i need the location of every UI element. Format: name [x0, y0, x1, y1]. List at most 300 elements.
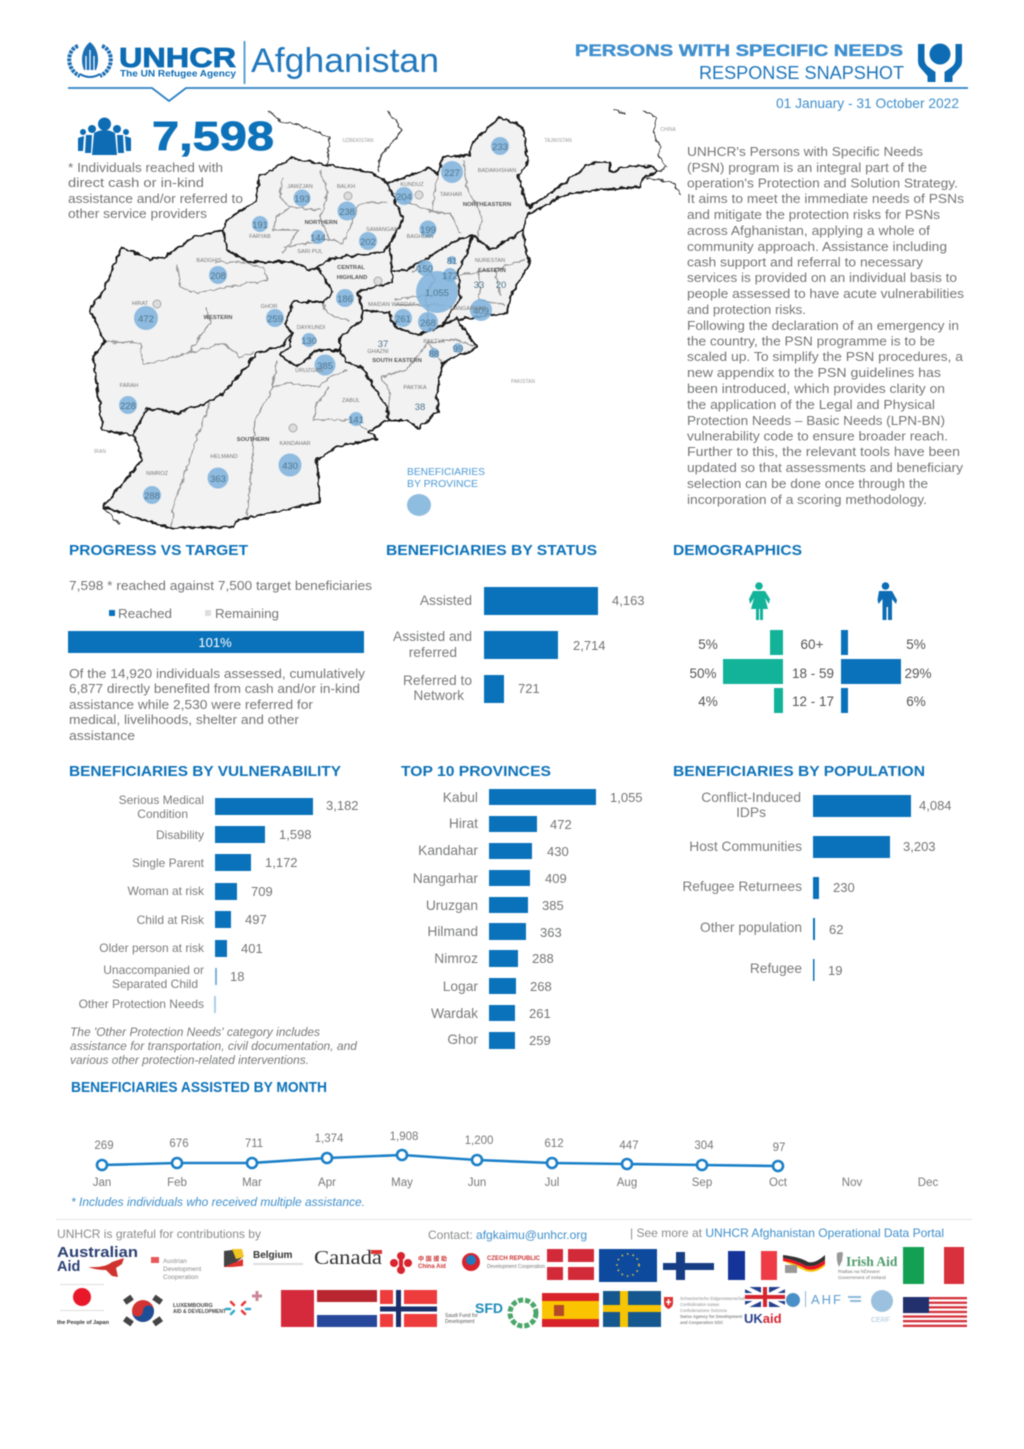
monthly line chart: Jul: [545, 1177, 559, 1189]
logo: Czech Republic: CZECH REPUBLIC: [487, 1256, 541, 1262]
status bar chart: Network: [413, 688, 464, 703]
vulnerability bar chart: Child at Risk: [137, 913, 205, 927]
monthly line chart: Oct: [769, 1177, 788, 1189]
thanks line: UNHCR is grateful for contributions by: [57, 1227, 261, 1241]
intro text: scaled up. To simplify the PSN procedures, a: [687, 349, 964, 364]
intro text: and protection risks.: [687, 302, 806, 317]
province and region labels: HIRAT: [132, 301, 149, 307]
province and region labels: BALKH: [337, 184, 355, 190]
donor logos: [57, 1245, 967, 1327]
vulnerability bar chart: 1,172: [265, 855, 298, 870]
province values: 38: [415, 402, 425, 413]
logo: Austrian Development Cooperation: Development: [163, 1266, 201, 1273]
heading: DEMOGRAPHICS: [673, 543, 802, 559]
contact: Contact: afgkaimu@unhcr.org: [428, 1228, 587, 1242]
panel: beneficiaries by status: [386, 543, 645, 703]
vulnerability bar chart: 1,598: [279, 827, 312, 842]
intro text: services is provided on an individual basis to: [687, 270, 957, 285]
logo: Canada: Canadä: [314, 1247, 382, 1269]
intro text: incorporation of a scoring methodology.: [687, 492, 927, 507]
progress bar: 101%: [198, 635, 232, 650]
population pyramid: 29%: [904, 666, 932, 681]
map legend: BENEFICIARIES: [407, 466, 485, 478]
population pyramid: 12 - 17: [792, 694, 834, 709]
monthly line chart: 97: [773, 1142, 785, 1154]
heading: PROGRESS VS TARGET: [69, 543, 248, 559]
logo: Australian Aid: [57, 1245, 138, 1277]
logo: Czech Republic: [462, 1253, 545, 1271]
vulnerability bar chart: [79, 793, 359, 1013]
logo: Korea: [123, 1295, 163, 1326]
vulnerability bar chart: 18: [230, 969, 244, 984]
heading: BENEFICIARIES ASSISTED BY MONTH: [71, 1080, 327, 1096]
panel: progress vs target: [68, 543, 372, 743]
population bar chart: Other population: [700, 920, 802, 935]
monthly line chart: 612: [544, 1138, 564, 1150]
snapshot title: PERSONS WITH SPECIFIC NEEDS: [575, 42, 903, 60]
province bar chart: 259: [529, 1033, 551, 1048]
map of Afghanistan: [90, 110, 680, 528]
vulnerability bar chart: Older person at risk: [99, 941, 205, 955]
progress note: assistance: [69, 728, 135, 743]
province bar chart: Kandahar: [418, 843, 478, 858]
province and region labels: GHOR: [261, 304, 277, 310]
intro text: operation's Protection and Solution Strategy.: [687, 176, 958, 190]
province and region labels: URUZGAN: [295, 368, 323, 374]
logo: CERF: CERF: [871, 1317, 890, 1324]
province values: 186: [337, 294, 353, 305]
map legend: [407, 466, 485, 516]
icon: people group: [78, 118, 131, 155]
province values: 268: [420, 318, 436, 329]
logo: China Aid: [390, 1252, 447, 1274]
province values: 409: [473, 306, 489, 317]
progress note: 6,877 directly benefited from cash and/or in-kind: [69, 681, 360, 696]
intro text: the application of the Legal and Physical: [687, 397, 935, 412]
note: other service providers: [68, 206, 207, 221]
monthly line chart: Dec: [918, 1177, 938, 1189]
province and region labels: [94, 127, 676, 477]
province and region labels: NIMROZ: [146, 471, 169, 477]
status bar chart: Assisted: [420, 593, 472, 608]
province and region labels: JAWZJAN: [287, 184, 313, 190]
province values: 199: [420, 225, 436, 236]
date range: 01 January - 31 October 2022: [776, 96, 959, 111]
province and region labels: NORTHERN: [305, 220, 337, 226]
province bar chart: Logar: [443, 979, 478, 994]
flag: Sweden: [603, 1291, 661, 1327]
population bar chart: 230: [833, 880, 855, 895]
monthly line chart: Apr: [318, 1177, 336, 1189]
province bar chart: 363: [540, 925, 562, 940]
population bar chart: 4,084: [919, 798, 952, 813]
province and region labels: SARI PUL: [297, 249, 323, 255]
population bar chart: IDPs: [736, 805, 766, 820]
note: [68, 160, 243, 221]
flag: Netherlands: [317, 1290, 377, 1327]
legend: [109, 606, 279, 621]
province values: 227: [444, 168, 460, 179]
map shapes: [90, 110, 680, 528]
province and region labels: FARAH: [120, 383, 138, 389]
icon: hands and person: [918, 44, 962, 82]
vulnerability bar chart: Serious Medical: [119, 793, 204, 807]
logo: AHF: AHF: [811, 1292, 843, 1307]
logo: Switzerland: Swiss Agency for Development: [680, 1314, 743, 1319]
status bar chart: 721: [518, 681, 540, 696]
flag: USA: [903, 1297, 967, 1327]
province bar chart: 385: [542, 898, 564, 913]
population bar chart: 62: [829, 922, 843, 937]
icon: female: [749, 582, 770, 620]
logo: Australian Aid: Australian: [57, 1245, 138, 1261]
province values: 1,055: [425, 288, 449, 299]
province and region labels: CHINA: [660, 127, 676, 133]
logo: UK aid: [744, 1287, 785, 1326]
logo: Irish Aid: Government of Ireland: [838, 1275, 886, 1281]
province and region labels: PAKTIKA: [403, 385, 427, 391]
vulnerability bar chart: 401: [241, 941, 263, 956]
province and region labels: HIGHLAND: [337, 275, 367, 281]
flag: EU: [599, 1249, 657, 1282]
province and region labels: BADGHIS: [196, 258, 222, 264]
snapshot subtitle: RESPONSE SNAPSHOT: [699, 62, 904, 83]
flag: Latvia: [281, 1290, 314, 1327]
province values: 202: [360, 237, 376, 248]
province values: 150: [417, 264, 433, 275]
logo: Luxembourg: LUXEMBOURG: [173, 1303, 213, 1309]
vulnerability bar chart: Condition: [137, 807, 188, 821]
legend: Reached: [118, 606, 172, 621]
intro text: vulnerability code to ensure broader reach.: [687, 428, 948, 444]
country title: Afghanistan: [251, 42, 439, 80]
intro text: been introduced, which provides clarity on: [687, 381, 945, 396]
vulnerability bar chart: Other Protection Needs: [79, 997, 204, 1011]
population pyramid: 60+: [801, 637, 824, 652]
category note: [70, 1027, 358, 1067]
intro text: (PSN) program is an integral part of the: [687, 160, 927, 175]
province bar chart: Nimroz: [434, 951, 478, 966]
logo: Australian Aid: Aid: [57, 1259, 80, 1275]
monthly line chart: Mar: [242, 1177, 262, 1189]
monthly line chart: Jun: [468, 1177, 486, 1189]
province values: 37: [378, 339, 388, 350]
province values: 288: [144, 491, 160, 502]
total reached: [68, 113, 274, 221]
footnote: * Includes individuals who received multiple assistance.: [71, 1197, 365, 1209]
population pyramid: [689, 630, 932, 713]
capacity markers: [153, 191, 423, 432]
vulnerability bar chart: Single Parent: [132, 856, 205, 870]
logo: Austrian Development Cooperation: Austrian: [163, 1258, 187, 1265]
intro text: cash support and referral to necessary: [687, 254, 923, 270]
province and region labels: UZBEKISTAN: [342, 138, 374, 144]
data portal: | See more at UNHCR Afghanistan Operational Data Portal: [630, 1226, 944, 1240]
province and region labels: NURESTAN: [475, 258, 505, 264]
province bubbles: [119, 137, 509, 504]
monthly line chart: 304: [694, 1140, 714, 1152]
progress note: assistance while 2,530 were referred for: [69, 697, 314, 712]
status bar chart: Referred to: [403, 673, 472, 688]
population pyramid: 4%: [698, 694, 718, 709]
flag: Finland: [663, 1252, 714, 1280]
population bar chart: 3,203: [903, 839, 936, 854]
population pyramid: 5%: [698, 637, 718, 652]
intro text: across Afghanistan, applying a whole of: [687, 223, 930, 238]
big number: 7,598: [152, 113, 274, 159]
logo: SFD: [445, 1300, 536, 1326]
icon: UNHCR logo: [69, 42, 111, 77]
province values: 363: [210, 474, 226, 485]
intro text: selection can be done once through the: [687, 476, 928, 491]
province values: 228: [120, 401, 136, 412]
logo: Switzerland: and Cooperation SDC: [680, 1320, 723, 1325]
status bar chart: referred: [409, 645, 457, 660]
logo: UK aid: UKaid: [744, 1311, 782, 1326]
province values: 33: [474, 280, 484, 291]
province values: 99: [453, 344, 463, 355]
monthly line chart: 1,200: [465, 1135, 493, 1147]
population bar chart: Refugee Returnees: [682, 879, 802, 894]
intro text: Further to this, the relevant tools have been: [687, 444, 960, 459]
monthly line chart: May: [391, 1177, 413, 1189]
category note: various other protection-related interventions.: [70, 1055, 309, 1067]
province values: 430: [282, 461, 298, 472]
heading: BENEFICIARIES BY VULNERABILITY: [69, 764, 341, 780]
flag: Norway: [380, 1290, 437, 1327]
logo: Austrian Development Cooperation: [151, 1257, 201, 1281]
panel: top 10 provinces: [401, 764, 643, 1049]
province values: 88: [429, 349, 439, 360]
province values: 20: [496, 280, 506, 291]
agency tagline: The UN Refugee Agency: [120, 68, 236, 78]
province and region labels: WESTERN: [204, 315, 232, 321]
vulnerability bar chart: 497: [245, 912, 267, 927]
population bar chart: Host Communities: [689, 839, 802, 854]
province bar chart: 288: [532, 951, 554, 966]
province and region labels: HELMAND: [210, 454, 238, 460]
progress note: Of the 14,920 individuals assessed, cumulatively: [69, 666, 365, 681]
population pyramid: 6%: [906, 694, 926, 709]
vulnerability bar chart: 3,182: [326, 798, 359, 813]
logo: Switzerland: [664, 1296, 746, 1325]
province and region labels: SOUTH EASTERN: [372, 358, 422, 364]
logo: Irish Aid: Rialtas na hÉireann: [838, 1268, 880, 1275]
population bar chart: Refugee: [750, 961, 802, 976]
province and region labels: BAGHLAN: [407, 234, 433, 240]
flag: Denmark: [547, 1249, 594, 1280]
province and region labels: TAJIKISTAN: [544, 138, 572, 144]
intro text: UNHCR's Persons with Specific Needs: [687, 144, 923, 159]
progress note: [69, 666, 365, 743]
province bar chart: 430: [547, 844, 569, 859]
UNHCR wordmark: UNHCR: [119, 42, 236, 73]
progress bar: [68, 631, 364, 653]
vulnerability bar chart: Unaccompanied or: [103, 963, 204, 977]
population bar chart: Conflict-Induced: [701, 790, 801, 805]
intro text: new appendix to the PSN guidelines has: [687, 365, 941, 380]
province and region labels: EASTERN: [478, 268, 506, 274]
province and region labels: GHAZNI: [367, 349, 389, 355]
logo: AHF: [786, 1291, 861, 1307]
note: direct cash or in-kind: [68, 175, 204, 190]
heading: BENEFICIARIES BY STATUS: [386, 543, 597, 559]
icon: male: [878, 582, 897, 620]
province values: 233: [492, 142, 508, 153]
logo: CERF: [871, 1290, 893, 1324]
province bar chart: Hirat: [449, 816, 478, 831]
province and region labels: NANGARHAR: [450, 306, 486, 312]
province bar chart: 472: [550, 817, 572, 832]
logo: SFD: Saudi Fund for: [445, 1313, 478, 1319]
logo: Luxembourg: AID & DEVELOPMENT: [173, 1309, 226, 1315]
province and region labels: PAKISTAN: [511, 379, 535, 385]
province values: 130: [301, 336, 317, 347]
progress note: medical, livelihoods, shelter and other: [69, 712, 300, 727]
logo: China Aid: China Aid: [418, 1264, 446, 1270]
monthly line chart: Nov: [842, 1177, 862, 1189]
province bar chart: Ghor: [447, 1032, 478, 1047]
intro text: people assessed to have acute vulnerabilities: [687, 286, 964, 301]
province and region labels: SAMANGAN: [366, 227, 398, 233]
population pyramid: 5%: [906, 637, 926, 652]
category note: assistance for transportation, civil documentation, and: [70, 1041, 358, 1053]
logo: Japan: the People of Japan: [57, 1320, 110, 1326]
logo: Germany: [783, 1255, 825, 1273]
province bar chart: 409: [545, 871, 567, 886]
logo: Irish Aid: [837, 1252, 898, 1281]
intro text: [687, 144, 964, 507]
status bar chart: 2,714: [573, 638, 606, 653]
vulnerability bar chart: Disability: [156, 828, 204, 842]
intro text: and mitigate the protection risks for PSNs: [687, 207, 940, 222]
province bar chart: 261: [529, 1006, 551, 1021]
footer: [57, 1226, 967, 1327]
status bar chart: Assisted and: [393, 629, 472, 644]
status bar chart: 4,163: [612, 593, 645, 608]
province bar chart: [413, 789, 643, 1049]
province bar chart: Wardak: [431, 1006, 478, 1021]
intro text: Protection Needs – Basic Needs (LPN-BN): [687, 413, 945, 428]
province values: 208: [210, 271, 226, 282]
panel: beneficiaries by population: [673, 764, 952, 981]
logo: SFD: Development: [445, 1319, 475, 1325]
province values: 191: [252, 220, 268, 231]
logo: Belgium: Belgium: [253, 1250, 293, 1261]
province and region labels: KUNDUZ: [400, 182, 424, 188]
province values: 141: [348, 415, 364, 426]
monthly line chart: Jan: [93, 1177, 111, 1189]
province values: 144: [310, 233, 326, 244]
flag: France: [728, 1251, 777, 1280]
province values: 193: [294, 194, 310, 205]
vulnerability bar chart: Separated Child: [112, 977, 198, 991]
monthly line chart: 1,374: [315, 1133, 344, 1145]
province and region labels: FARYAB: [249, 234, 271, 240]
province values: 472: [138, 314, 154, 325]
flag: Italy: [903, 1247, 964, 1284]
population pyramid: 50%: [689, 666, 717, 681]
province and region labels: KANDAHAR: [279, 441, 311, 447]
province values: 81: [447, 256, 457, 267]
monthly line chart: 269: [94, 1140, 114, 1152]
panel: beneficiaries by vulnerability: [69, 764, 359, 1067]
logo: Irish Aid: Irish Aid: [846, 1254, 898, 1269]
logo: SFD: SFD: [475, 1300, 503, 1316]
population bar chart: [682, 790, 952, 981]
category note: The 'Other Protection Needs' category includes: [70, 1027, 320, 1039]
note: * Individuals reached with: [68, 160, 223, 175]
logo: Switzerland: Schweizerische Eidgenossenschaft: [680, 1296, 746, 1301]
logo: China Aid: 中 国 援 助: [418, 1255, 447, 1263]
province and region labels: TAKHAR: [440, 192, 462, 198]
monthly line chart: 676: [169, 1138, 189, 1150]
intro text: community approach. Assistance including: [687, 239, 947, 254]
legend: Remaining: [215, 606, 279, 621]
province values: 204: [396, 192, 412, 203]
province bar chart: 268: [530, 979, 552, 994]
province bar chart: Hilmand: [427, 924, 478, 939]
province values: 385: [317, 361, 333, 372]
province values: [120, 142, 508, 502]
panel: demographics: [673, 543, 932, 713]
province and region labels: CENTRAL: [337, 265, 365, 271]
province values: 259: [267, 314, 283, 325]
logo: Switzerland: Confédération suisse: [680, 1302, 720, 1307]
province and region labels: PAKTYA: [423, 339, 445, 345]
status bar chart: [393, 587, 645, 703]
logo: Japan: [57, 1284, 110, 1326]
note: assistance and/or referred to: [68, 191, 243, 206]
province bar chart: Nangarhar: [413, 871, 478, 886]
monthly line chart: Sep: [692, 1177, 712, 1189]
vulnerability bar chart: 709: [251, 884, 273, 899]
population bar chart: 19: [828, 963, 842, 978]
province and region labels: MAIDAN WARDAK: [368, 302, 416, 308]
province and region labels: IRAN: [94, 449, 106, 455]
logo: Czech Republic: Development Cooperation: [487, 1264, 545, 1270]
logo: Luxembourg: [173, 1291, 262, 1315]
header: [68, 41, 968, 111]
province values: 261: [395, 314, 411, 325]
heading: TOP 10 PROVINCES: [401, 764, 551, 780]
population pyramid: 18 - 59: [792, 666, 834, 681]
intro text: Following the declaration of an emergency in: [687, 318, 959, 333]
province and region labels: SOUTHERN: [237, 437, 269, 443]
monthly line chart: Feb: [167, 1177, 187, 1189]
province and region labels: NORTHEASTERN: [463, 202, 511, 208]
province and region labels: DAYKUNDI: [297, 325, 326, 331]
province bar chart: Uruzgan: [426, 898, 478, 913]
flag: Spain: [542, 1293, 599, 1327]
monthly line chart: 447: [619, 1140, 639, 1152]
intro text: It aims to meet the immediate needs of PSNs: [687, 191, 964, 206]
province values: 238: [339, 207, 355, 218]
province values: 172: [442, 271, 458, 282]
province bar chart: 1,055: [610, 790, 643, 805]
province and region labels: BADAKHSHAN: [478, 168, 516, 174]
monthly line chart: 1,908: [390, 1131, 418, 1143]
monthly line chart: 711: [245, 1138, 263, 1150]
heading: BENEFICIARIES BY POPULATION: [673, 764, 925, 780]
intro text: updated so that assessments and beneficiary: [687, 460, 963, 475]
monthly line chart: [93, 1131, 938, 1189]
intro text: the country, the PSN programme is to be: [687, 334, 935, 348]
province and region labels: ZABUL: [342, 398, 360, 404]
province bar chart: Kabul: [443, 790, 478, 805]
monthly line chart: Aug: [617, 1177, 637, 1189]
logo: Austrian Development Cooperation: Cooperation: [163, 1274, 199, 1281]
